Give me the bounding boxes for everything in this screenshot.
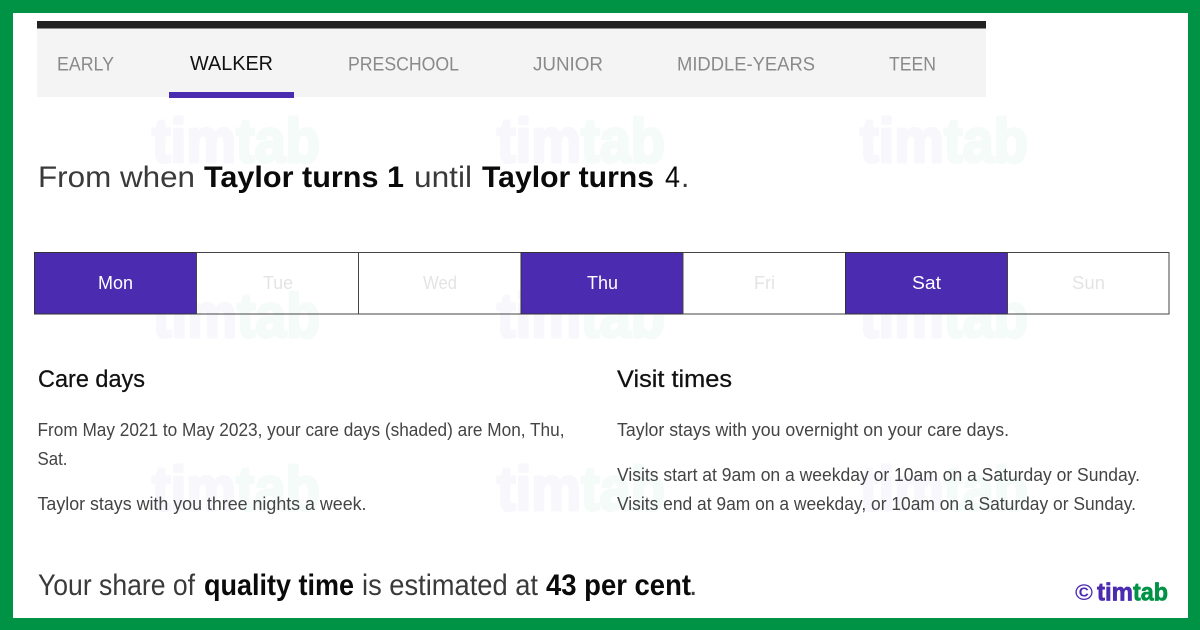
callout: quality time share: .	[689, 569, 697, 602]
panel: stage tabs	[37, 21, 986, 98]
watermarks: tab	[236, 455, 320, 524]
text block: care days details: Taylor stays with you three nights a week.	[38, 493, 366, 514]
day: Fri	[683, 252, 846, 314]
logo: timtab: ©	[1075, 580, 1093, 605]
text block: visit times details	[617, 419, 1140, 514]
heading: age range: until	[414, 161, 472, 194]
text block: visit times details: Visits start at 9am on a weekday or 10am on a Saturday or Sunday.	[617, 464, 1140, 485]
logo: timtab: tim	[1097, 578, 1133, 606]
text block: care days details	[38, 419, 564, 514]
heading: age range: 4	[665, 161, 680, 194]
callout: quality time share: is estimated at	[362, 569, 539, 602]
callout: quality time share: 43 per cent	[546, 569, 691, 602]
watermarks: tim	[497, 107, 581, 176]
day: Thu (care day)	[521, 252, 683, 314]
watermarks: tab	[236, 107, 320, 176]
heading: age range: .	[681, 161, 689, 194]
text block: care days details: From May 2021 to May 2023, your care days (shaded) are Mon, Thu,	[38, 419, 564, 440]
watermarks: tab	[944, 282, 1028, 351]
watermarks: tab	[581, 455, 665, 524]
watermarks: tab	[944, 455, 1028, 524]
day: Sat (care day): Sat	[912, 272, 941, 293]
day: Mon (care day)	[34, 252, 196, 314]
watermarks: tab	[237, 282, 320, 351]
tab: early: EARLY	[57, 54, 114, 76]
watermarks: tim	[860, 455, 944, 524]
tab: teen: TEEN	[889, 54, 936, 76]
tab: junior: JUNIOR	[533, 54, 603, 76]
watermarks: tim	[153, 282, 237, 351]
watermarks: tim	[152, 107, 236, 176]
heading: age range	[38, 161, 689, 194]
panel: care days	[38, 366, 564, 514]
active tab underline	[169, 92, 294, 98]
watermarks: tim	[152, 455, 236, 524]
watermarks: tim	[497, 455, 581, 524]
chart: weekly care days	[34, 252, 1169, 314]
day: Sat (care day)	[846, 252, 1008, 314]
watermarks: tab	[944, 107, 1028, 176]
day: Tue: Tue	[263, 272, 293, 293]
day: Sun: Sun	[1072, 272, 1105, 293]
text block: visit times details: Taylor stays with you overnight on your care days.	[617, 419, 1009, 440]
watermarks: tim	[860, 282, 944, 351]
heading: care days: Care days	[38, 366, 145, 393]
day: Wed: Wed	[423, 272, 457, 293]
day: Sun	[1008, 252, 1169, 314]
watermarks	[152, 107, 1028, 524]
watermarks: tab	[581, 282, 665, 351]
heading: age range: Taylor turns 1	[204, 161, 404, 194]
heading: age range: Taylor turns	[482, 161, 654, 194]
logo: timtab	[1075, 578, 1168, 606]
panel: visit times	[617, 366, 1140, 514]
day: Fri: Fri	[754, 272, 775, 293]
watermarks: tim	[860, 107, 944, 176]
logo: timtab: tab	[1133, 578, 1168, 606]
callout: quality time share: quality time	[204, 569, 354, 602]
text block: visit times details: Visits end at 9am on a weekday, or 10am on a Saturday or Sunday.	[617, 493, 1136, 514]
day: Wed	[358, 252, 521, 314]
watermarks: tim	[497, 282, 581, 351]
day: Thu (care day): Thu	[587, 272, 618, 293]
tab: middle-years: MIDDLE-YEARS	[677, 54, 815, 76]
tab: walker (active): WALKER	[190, 53, 273, 75]
text block: care days details: Sat.	[38, 448, 68, 469]
callout: quality time share	[38, 569, 697, 602]
heading: visit times: Visit times	[617, 366, 732, 393]
heading: age range: From when	[38, 161, 195, 194]
watermarks: tab	[581, 107, 665, 176]
day: Mon (care day): Mon	[98, 272, 133, 293]
day: Tue	[196, 252, 358, 314]
callout: quality time share: Your share of	[38, 569, 196, 602]
tab: preschool: PRESCHOOL	[348, 54, 459, 76]
